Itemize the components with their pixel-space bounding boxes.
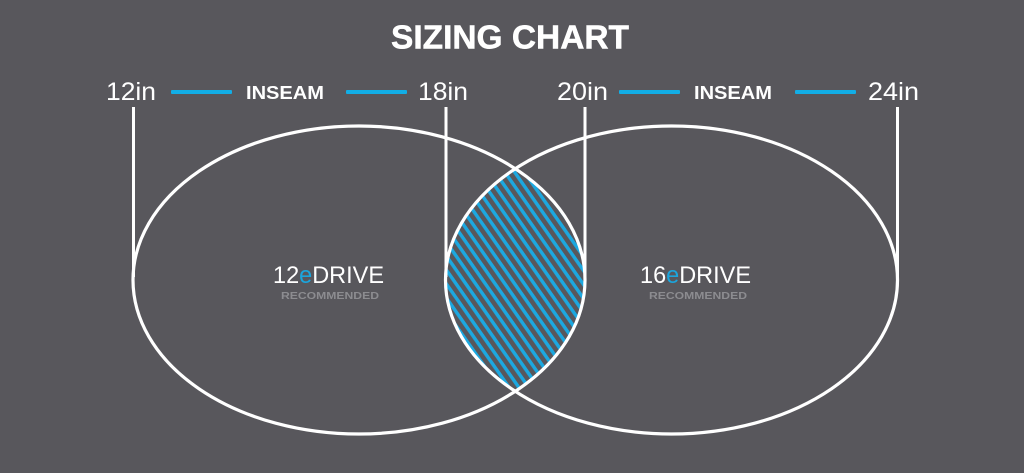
left dash 2: [346, 90, 407, 94]
product label: 12eDRIVE: 12eDRIVE: [273, 262, 384, 289]
recommended label right: RECOMMENDED: [649, 290, 747, 302]
sizing chart infographic: [108, 25, 918, 436]
right dash 2: [795, 90, 856, 94]
label: INSEAM left: INSEAM: [246, 83, 324, 103]
label: 20in: 20in: [557, 78, 608, 106]
marker line: 18in: [444, 107, 448, 277]
label: 24in: 24in: [868, 78, 919, 106]
right dash 1: [619, 90, 680, 94]
marker line: 24in: [896, 107, 899, 277]
marker line: 12in: [132, 107, 135, 277]
ellipse: 16eDRIVE: [446, 126, 898, 434]
left dash 1: [171, 90, 232, 94]
recommended label left: RECOMMENDED: [281, 290, 379, 302]
label: 12in: 12in: [106, 78, 156, 106]
ellipse: 12eDRIVE: [133, 126, 585, 434]
marker line: 20in: [584, 107, 586, 277]
title: SIZING CHART: [391, 18, 629, 56]
label: 18in: 18in: [418, 78, 468, 106]
product label: 16eDRIVE: 16eDRIVE: [640, 262, 751, 289]
overlap hatch region: [447, 170, 584, 388]
label: INSEAM right: INSEAM: [694, 83, 772, 103]
